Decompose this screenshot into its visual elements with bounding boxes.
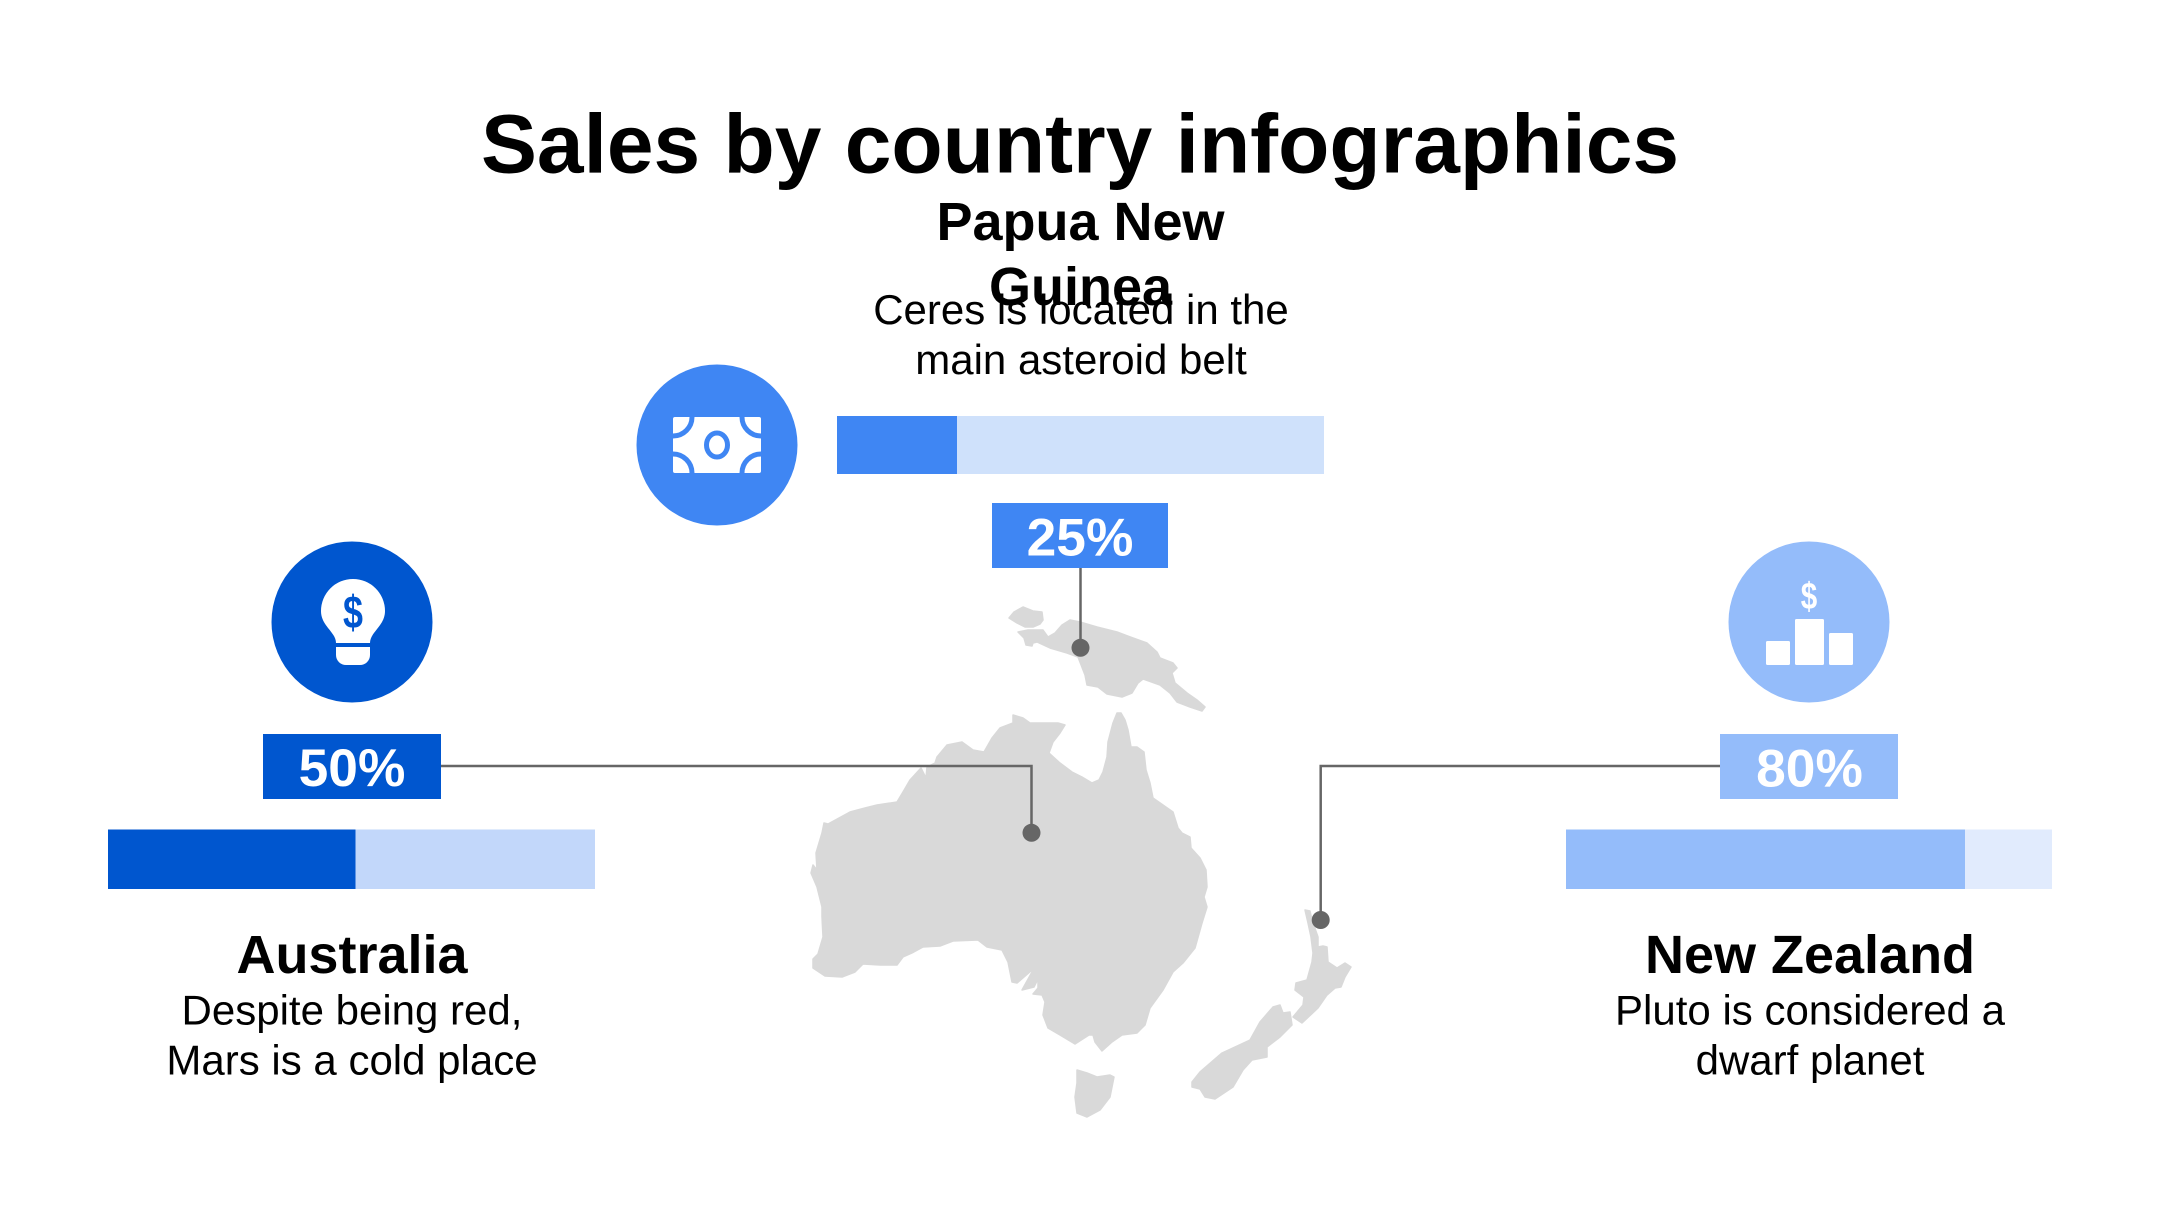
description: Papua New Guinea: main asteroid belt <box>915 336 1247 383</box>
icon: light bulb with dollar <box>272 542 432 702</box>
label: 25% <box>992 503 1168 568</box>
icon: podium with dollar <box>1728 542 1890 702</box>
description: Papua New Guinea: Ceres is located in the <box>873 286 1289 333</box>
description: New Zealand <box>1615 986 2006 1084</box>
panel: Australia <box>108 542 595 1084</box>
icon: banknote <box>636 364 798 526</box>
description: New Zealand: Pluto is considered a <box>1615 986 2006 1034</box>
connector: New Zealand <box>1312 766 1720 929</box>
heading: Papua New Guinea <box>936 192 1226 317</box>
map: Australia mainland <box>811 713 1207 1051</box>
map: New Zealand North Island <box>1293 910 1351 1023</box>
label: 50% <box>263 734 441 799</box>
description: Australia: Despite being red, <box>182 986 522 1034</box>
map: New Zealand South Island <box>1192 1005 1292 1099</box>
heading: Papua New Guinea: Guinea <box>989 257 1173 317</box>
panel: Papua New Guinea <box>636 192 1324 568</box>
progress bar: 80% <box>1566 830 2052 889</box>
progress bar: 25% <box>837 416 1324 474</box>
label: 50%: 50% <box>299 739 405 798</box>
connector: Australia <box>441 766 1040 842</box>
icon: podium with dollar: $ <box>1801 576 1817 618</box>
heading: Papua New Guinea: Papua New <box>936 192 1226 252</box>
heading: Australia: Australia <box>236 925 469 985</box>
map: Papua New Guinea west <box>1009 607 1043 627</box>
description: Papua New Guinea <box>873 286 1289 383</box>
title: Sales by country infographics <box>481 96 1679 190</box>
description: Australia: Mars is a cold place <box>166 1036 538 1084</box>
description: New Zealand: dwarf planet <box>1696 1036 1925 1084</box>
label: 80% <box>1720 734 1898 799</box>
connector: Papua New Guinea <box>1072 568 1090 657</box>
description: Australia <box>166 986 538 1084</box>
map: Papua New Guinea <box>1018 620 1205 711</box>
label: 25%: 25% <box>1027 508 1133 568</box>
map: Tasmania <box>1075 1070 1114 1117</box>
map: Oceania <box>811 607 1351 1117</box>
icon: light bulb with dollar: $ <box>343 587 363 638</box>
progress bar: 50% <box>108 830 595 889</box>
label: 80%: 80% <box>1756 740 1863 798</box>
panel: New Zealand <box>1566 542 2052 1084</box>
heading: New Zealand: New Zealand <box>1645 925 1975 985</box>
